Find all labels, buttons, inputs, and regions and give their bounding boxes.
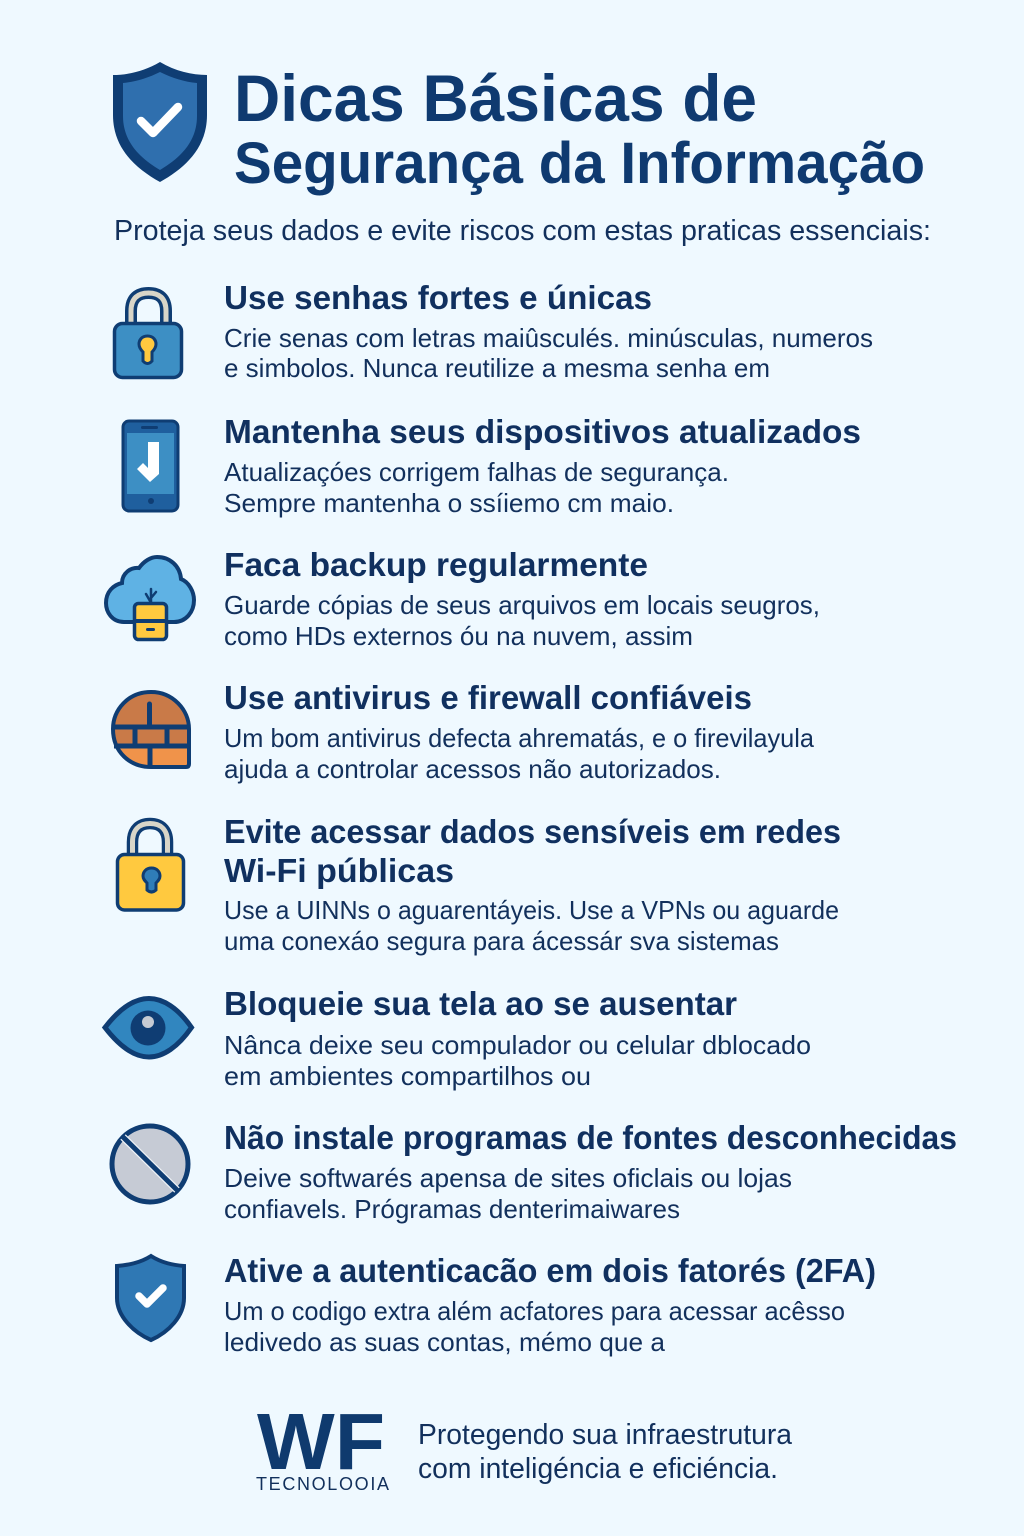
description — [224, 1163, 792, 1224]
heading: Evite acessar dados sensíveis em redes — [224, 813, 841, 850]
icon: cloud and drive — [106, 557, 194, 640]
icon: prohibited sign — [112, 1126, 188, 1202]
tip 5: public Wi-Fi — [118, 813, 841, 956]
icon: eye — [105, 998, 192, 1057]
heading: Faca backup regularmente — [224, 546, 648, 583]
tip 1: strong passwords — [114, 279, 873, 383]
tip 2: updated devices — [123, 413, 861, 518]
tip 7: unknown software — [112, 1119, 957, 1224]
tip 3: backup — [106, 546, 820, 651]
footer logo: TECNOLOOIA — [256, 1474, 389, 1494]
description: Crie senas com letras maiûsculés. minúsculas, numeros — [224, 323, 873, 353]
footer tagline: com inteligéncia e eficiéncia. — [418, 1453, 778, 1485]
heading: Wi-Fi públicas — [224, 852, 454, 889]
description: ledivedo as suas contas, mémo que a — [224, 1327, 666, 1357]
icon: firewall — [113, 692, 189, 767]
description: Nânca deixe seu compulador ou celular dblocado — [224, 1030, 811, 1060]
description — [224, 457, 729, 518]
heading: Ative a autenticacão em dois fatorés (2FA) — [224, 1252, 876, 1289]
footer tagline — [418, 1419, 793, 1485]
description: Deive softwarés apensa de sites oficlais ou lojas — [224, 1163, 792, 1193]
heading: Mantenha seus dispositivos atualizados — [224, 413, 861, 450]
description — [224, 1296, 845, 1357]
description: e simbolos. Nunca reutilize a mesma senha em — [224, 353, 770, 383]
description — [224, 590, 820, 651]
icon: small shield — [117, 1256, 184, 1340]
tip 4: antivirus and firewall — [113, 679, 815, 784]
description: confiavels. Prógramas denterimaiwares — [224, 1194, 680, 1224]
footer logo: WF — [257, 1397, 385, 1486]
description: em ambientes compartilhos ou — [224, 1061, 591, 1091]
heading — [224, 813, 841, 889]
description: Um bom antivirus defecta ahrematás, e o firevilayula — [224, 723, 815, 753]
footer tagline: Protegendo sua infraestrutura — [418, 1419, 793, 1451]
icon: header shield — [113, 62, 207, 182]
description: uma conexáo segura para ácessár sva sistemas — [224, 926, 779, 956]
heading: Use senhas fortes e únicas — [224, 279, 652, 316]
description: Sempre mantenha o ssíiemo cm maio. — [224, 488, 674, 518]
description — [224, 323, 873, 383]
heading: Bloqueie sua tela ao se ausentar — [224, 985, 737, 1022]
description — [224, 723, 815, 784]
heading: Use antivirus e firewall confiáveis — [224, 679, 752, 716]
description: Atualizaçóes corrigem falhas de segurança. — [224, 457, 729, 487]
description: Use a UINNs o aguarentáyeis. Use a VPNs ou aguarde — [224, 895, 839, 925]
description: Um o codigo extra além acfatores para acessar acêsso — [224, 1296, 845, 1326]
title — [234, 61, 925, 196]
description — [224, 895, 839, 956]
icon: blue padlock — [114, 293, 182, 378]
icon: yellow padlock — [118, 824, 184, 910]
description: como HDs externos óu na nuvem, assim — [224, 621, 693, 651]
title: Segurança da Informação — [234, 131, 925, 196]
subtitle: Proteja seus dados e evite riscos com estas praticas essenciais: — [114, 215, 931, 247]
tip 6: lock screen — [105, 985, 811, 1091]
heading: Não instale programas de fontes desconhecidas — [224, 1119, 957, 1156]
description — [224, 1030, 811, 1091]
tip 8: two-factor authentication — [117, 1252, 876, 1357]
description: ajuda a controlar acessos não autorizados. — [224, 754, 721, 784]
icon: smartphone — [123, 421, 178, 511]
title: Dicas Básicas de — [234, 61, 757, 135]
description: Guarde cópias de seus arquivos em locais seugros, — [224, 590, 820, 620]
